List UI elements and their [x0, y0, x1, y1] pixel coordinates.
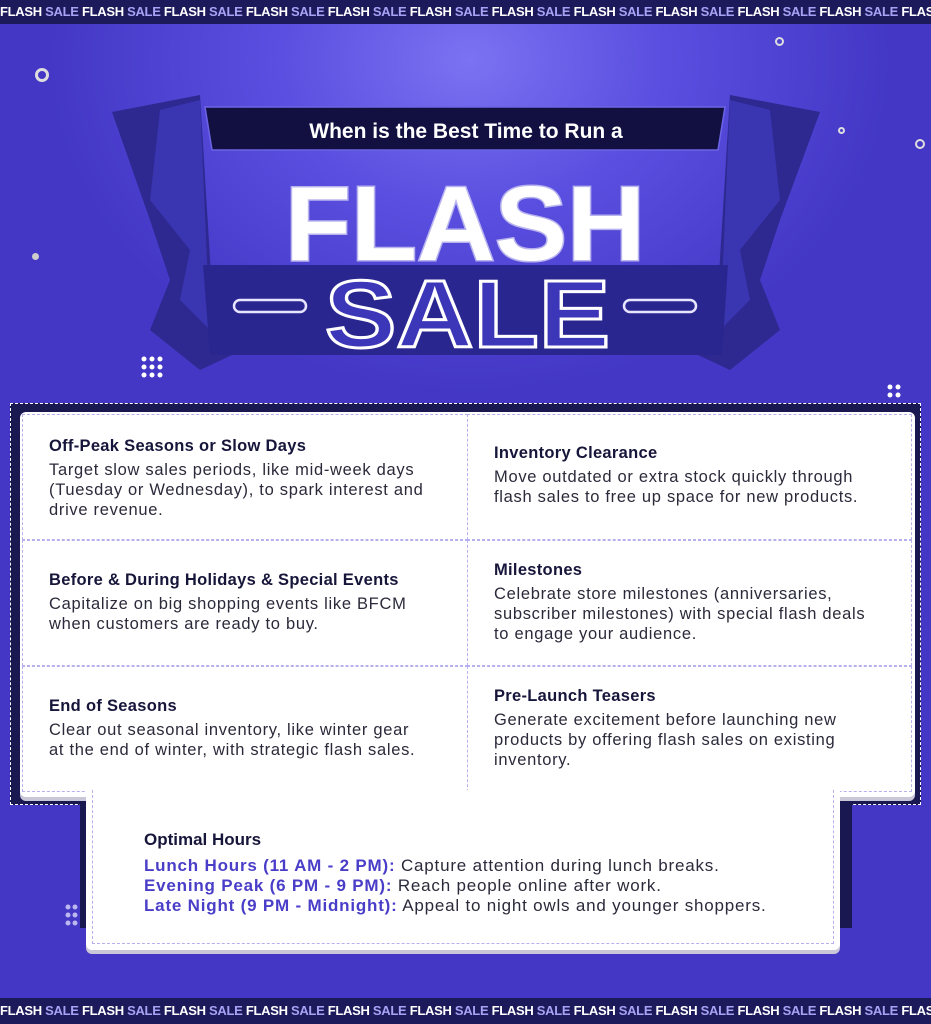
- hours list: Late Night (9 PM - Midnight): Appeal to night owls and younger shoppers.: [144, 896, 767, 915]
- cell: holidays: Before & During Holidays & Special Events: [49, 571, 399, 589]
- dark frame behind grid: [10, 403, 921, 805]
- cell: holidays: Capitalize on big shopping events like BFCM: [49, 595, 407, 613]
- SALE: SALE: [325, 261, 610, 368]
- heading: Optimal Hours: [144, 830, 261, 849]
- cell: milestones: [467, 540, 912, 666]
- cell: pre-launch: inventory.: [494, 751, 571, 769]
- cell: off-peak: drive revenue.: [49, 501, 163, 519]
- cell: milestones: to engage your audience.: [494, 625, 697, 643]
- cell: inventory: flash sales to free up space for new products.: [494, 488, 858, 506]
- cell: end of seasons: End of Seasons: [49, 697, 177, 715]
- panel: tips grid: [20, 412, 915, 797]
- hours list: Evening Peak (6 PM - 9 PM): Reach people online after work.: [144, 876, 662, 895]
- dot grids: [142, 356, 162, 378]
- cell: pre-launch: Pre-Launch Teasers: [494, 687, 656, 705]
- subtitle: When is the Best Time to Run a: [309, 120, 623, 143]
- cell: pre-launch: products by offering flash sales on existing: [494, 731, 835, 749]
- hours list: [144, 856, 767, 915]
- cell: end of seasons: at the end of winter, with strategic flash sales.: [49, 741, 415, 759]
- panel: optimal hours: [86, 790, 840, 950]
- cell: holidays: [22, 540, 468, 666]
- FLASH: FLASH: [285, 165, 645, 283]
- hours list: Lunch Hours (11 AM - 2 PM): Capture attention during lunch breaks.: [144, 856, 720, 875]
- cell: off-peak: Target slow sales periods, like mid-week days: [49, 461, 414, 479]
- cell: milestones: Milestones: [494, 561, 582, 579]
- decorative rings: [32, 37, 925, 260]
- cell: inventory: Move outdated or extra stock quickly through: [494, 468, 853, 486]
- cell: off-peak: [22, 414, 468, 540]
- top banner: repeating flash sale: [0, 0, 931, 24]
- hero: lightning banner with title: [112, 95, 820, 370]
- cell: off-peak: (Tuesday or Wednesday), to spark interest and: [49, 481, 424, 499]
- cell: milestones: subscriber milestones) with special flash deals: [494, 605, 865, 623]
- cell: end of seasons: [22, 666, 468, 792]
- cell: end of seasons: Clear out seasonal inventory, like winter gear: [49, 721, 409, 739]
- cell: pre-launch: [467, 666, 912, 792]
- cell: inventory: Inventory Clearance: [494, 444, 657, 462]
- cell: off-peak: Off-Peak Seasons or Slow Days: [49, 437, 306, 455]
- cell: inventory: [467, 414, 912, 540]
- dot grids lower: [66, 904, 78, 926]
- cell: milestones: Celebrate store milestones (anniversaries,: [494, 585, 832, 603]
- bottom banner: [0, 998, 931, 1024]
- cell: pre-launch: Generate excitement before launching new: [494, 711, 837, 729]
- cell: holidays: when customers are ready to buy.: [49, 615, 319, 633]
